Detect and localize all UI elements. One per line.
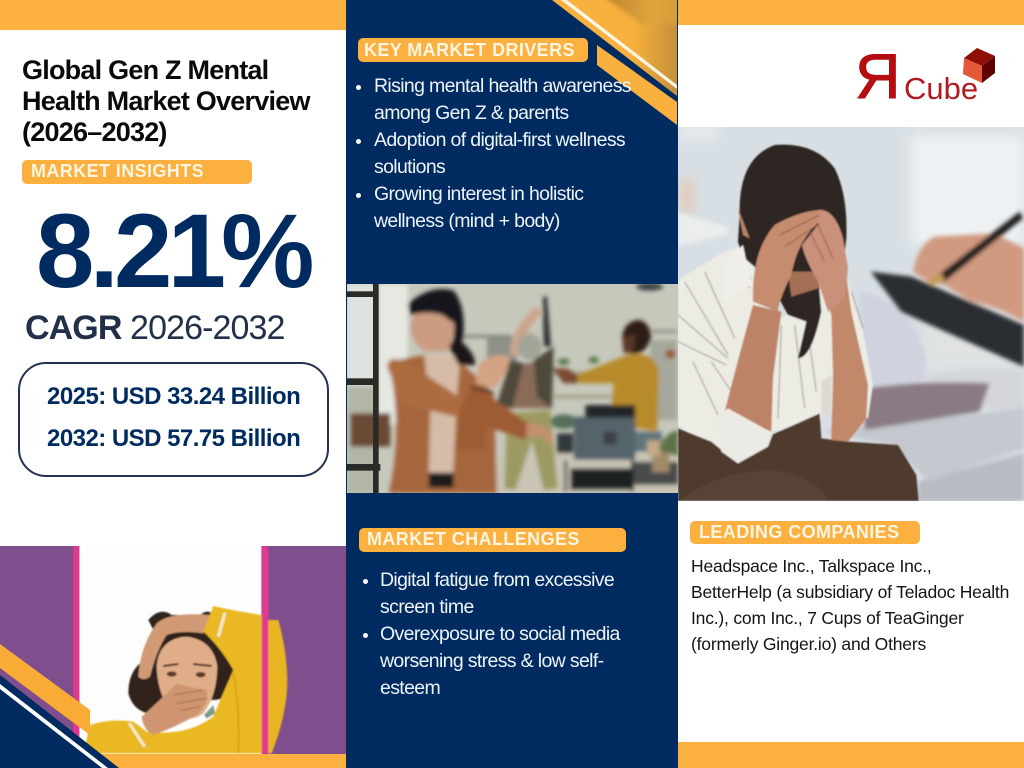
market size 2025: 2025: USD 33.24 Billion <box>47 383 300 410</box>
top orange band <box>0 0 346 30</box>
heading: leading companies: LEADING COMPANIES <box>699 522 899 542</box>
window frame <box>373 284 379 493</box>
driver 2: solutions <box>374 156 445 178</box>
trousers <box>678 413 919 501</box>
challenge 2 <box>363 623 620 699</box>
hand over mouth <box>142 683 207 735</box>
panel: left column <box>0 0 346 768</box>
driver 3 <box>356 183 584 232</box>
title: Health Market Overview <box>22 86 310 116</box>
clipboard <box>871 272 1024 367</box>
hair <box>738 145 847 358</box>
text: company list: Inc.), com Inc., 7 Cups of TeaGinger <box>691 608 964 628</box>
arms <box>725 305 781 432</box>
panel: right column <box>678 0 1024 768</box>
heading: market insights <box>22 160 252 184</box>
list: key market drivers <box>356 75 631 232</box>
text: company list: BetterHelp (a subsidiary of Teladoc Health <box>691 582 1009 602</box>
young woman: head <box>449 337 475 365</box>
photo: young woman covering mouth <box>0 546 346 754</box>
heading: market insights: MARKET INSIGHTS <box>31 161 204 181</box>
challenge 2: Overexposure to social media <box>380 623 620 645</box>
heading: key market drivers: KEY MARKET DRIVERS <box>364 40 575 60</box>
hands <box>753 210 821 312</box>
text: company list: (formerly Ginger.io) and Others <box>691 634 926 654</box>
photo: group stretching in office <box>347 284 678 493</box>
driver 2: Adoption of digital-first wellness <box>374 129 625 151</box>
doctor's hand <box>913 233 1024 322</box>
market size 2032: 2032: USD 57.75 Billion <box>47 425 300 452</box>
title: Global Gen Z Mental <box>22 55 268 85</box>
shirt <box>678 243 873 463</box>
logo: RCube <box>855 42 995 112</box>
bottom orange band <box>0 754 346 768</box>
man <box>577 354 659 432</box>
text: company list: Headspace Inc., Talkspace Inc., <box>691 556 932 576</box>
CAGR label: CAGR 2026-2032 <box>25 309 285 347</box>
challenge 2: esteem <box>380 677 440 699</box>
panel: middle column <box>346 0 678 768</box>
challenge 1 <box>363 569 614 618</box>
driver 3: wellness (mind + body) <box>374 210 560 232</box>
face <box>788 272 825 297</box>
logo mirrored R: Я <box>855 42 900 112</box>
driver 1: among Gen Z & parents <box>374 102 568 124</box>
challenge 1: Digital fatigue from excessive <box>380 569 614 591</box>
driver 2 <box>356 129 625 178</box>
driver 1 <box>356 75 631 124</box>
challenge 1: screen time <box>380 596 474 618</box>
title <box>22 55 310 147</box>
logo cube icon <box>963 48 995 83</box>
cuffs <box>715 408 773 463</box>
decorative corner chevrons <box>0 644 119 768</box>
hair <box>128 612 235 715</box>
heading: market challenges <box>359 528 626 552</box>
driver 1: Rising mental health awareness <box>374 75 631 97</box>
sofa <box>860 292 926 388</box>
photo: distressed woman in therapy <box>678 127 1024 501</box>
face <box>157 637 217 719</box>
printer cart <box>574 417 635 460</box>
top orange band <box>678 0 1024 25</box>
heading: market challenges: MARKET CHALLENGES <box>367 529 580 549</box>
sweater <box>83 606 262 753</box>
collar <box>725 245 751 300</box>
logo word: Cube <box>904 71 978 106</box>
elder woman <box>504 410 558 490</box>
big stat: CAGR percent: 8.21% <box>36 193 310 310</box>
upper arm raised <box>138 614 210 679</box>
text: company list <box>691 556 1009 654</box>
decorative corner ribbon <box>552 0 677 125</box>
challenge 2: worsening stress & low self- <box>380 650 603 672</box>
list: market challenges <box>363 569 620 699</box>
driver 3: Growing interest in holistic <box>374 183 583 205</box>
title: (2026–2032) <box>22 117 167 147</box>
bottom orange band <box>678 742 1024 768</box>
young woman: jacket <box>389 355 497 493</box>
callout: market size <box>18 362 329 477</box>
